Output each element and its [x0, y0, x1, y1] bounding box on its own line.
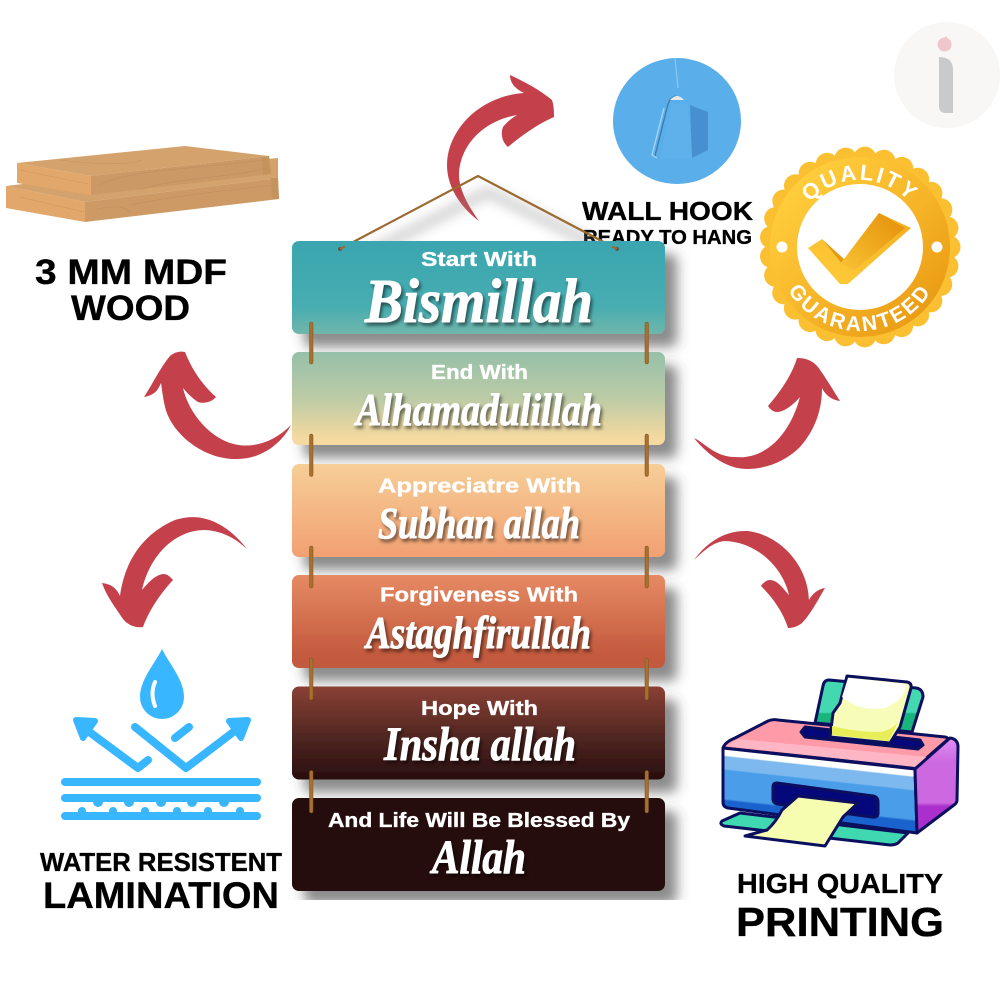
- panel: forgiveness with astaghfirullah: Astaghfirullah: [364, 608, 591, 658]
- icon: water resistant lamination: [61, 649, 261, 820]
- label: 3 mm mdf wood: 3 MM MDF: [35, 253, 227, 292]
- icon: wood planks: [6, 146, 279, 222]
- label: 3 mm mdf wood: [35, 253, 227, 328]
- label: water resistent lamination: LAMINATION: [43, 875, 279, 916]
- watermark logo: [894, 22, 1000, 128]
- label: wall hook ready to hang: WALL HOOK: [582, 196, 753, 226]
- panel: forgiveness with astaghfirullah: [292, 575, 665, 668]
- label: high quality printing: [736, 868, 944, 945]
- arrow: to wall hook: [447, 75, 554, 221]
- connecting ropes: [310, 322, 648, 813]
- layers: [61, 778, 261, 820]
- arrow: to quality seal: [694, 358, 840, 469]
- hanging rope: [340, 176, 617, 249]
- panel: appreciatre with subhan allah: Appreciatre With: [378, 476, 581, 498]
- label: wall hook ready to hang: [582, 196, 753, 249]
- label: water resistent lamination: WATER RESISTENT: [40, 847, 282, 877]
- panel: hope with insha allah: Insha allah: [383, 718, 576, 771]
- panel: and life will be blessed by allah: Allah: [429, 831, 526, 884]
- check mark: [808, 213, 911, 284]
- panel: end with alhamadulillah: [292, 352, 665, 445]
- panel: start with bismillah: Bismillah: [364, 268, 593, 336]
- arrow: to mdf wood: [144, 352, 291, 459]
- panel: start with bismillah: [292, 241, 665, 336]
- panel: forgiveness with astaghfirullah: Forgiveness With: [380, 584, 578, 606]
- panel: and life will be blessed by allah: [292, 798, 665, 891]
- icon: quality guaranteed seal: GUARANTEED: [790, 285, 928, 332]
- panel: end with alhamadulillah: End With: [431, 362, 528, 384]
- arrow: to printing: [694, 531, 825, 628]
- panel: hope with insha allah: Hope With: [421, 698, 538, 720]
- label: high quality printing: PRINTING: [736, 899, 944, 945]
- label: wall hook ready to hang: READY TO HANG: [583, 227, 752, 249]
- label: water resistent lamination: [40, 847, 282, 916]
- panel: appreciatre with subhan allah: Subhan allah: [378, 499, 580, 548]
- icon: quality guaranteed seal: [760, 146, 960, 348]
- panel: and life will be blessed by allah: And Life Will Be Blessed By: [328, 810, 631, 832]
- hanging sign: [292, 176, 665, 891]
- icon: blue wall hook: [613, 58, 741, 184]
- panel: end with alhamadulillah: Alhamadulillah: [354, 384, 602, 435]
- icon: printer: [721, 676, 958, 846]
- label: high quality printing: HIGH QUALITY: [737, 868, 943, 899]
- deflected arrows: [76, 720, 248, 768]
- water drop: [140, 649, 184, 719]
- panel: start with bismillah: Start With: [421, 249, 537, 271]
- panel: appreciatre with subhan allah: [292, 464, 665, 557]
- panel: hope with insha allah: [292, 686, 665, 780]
- label: 3 mm mdf wood: WOOD: [71, 289, 190, 328]
- icon: quality guaranteed seal: QUALITY: [802, 164, 918, 199]
- rope shadow: [350, 192, 630, 262]
- arrow: to lamination: [102, 517, 247, 627]
